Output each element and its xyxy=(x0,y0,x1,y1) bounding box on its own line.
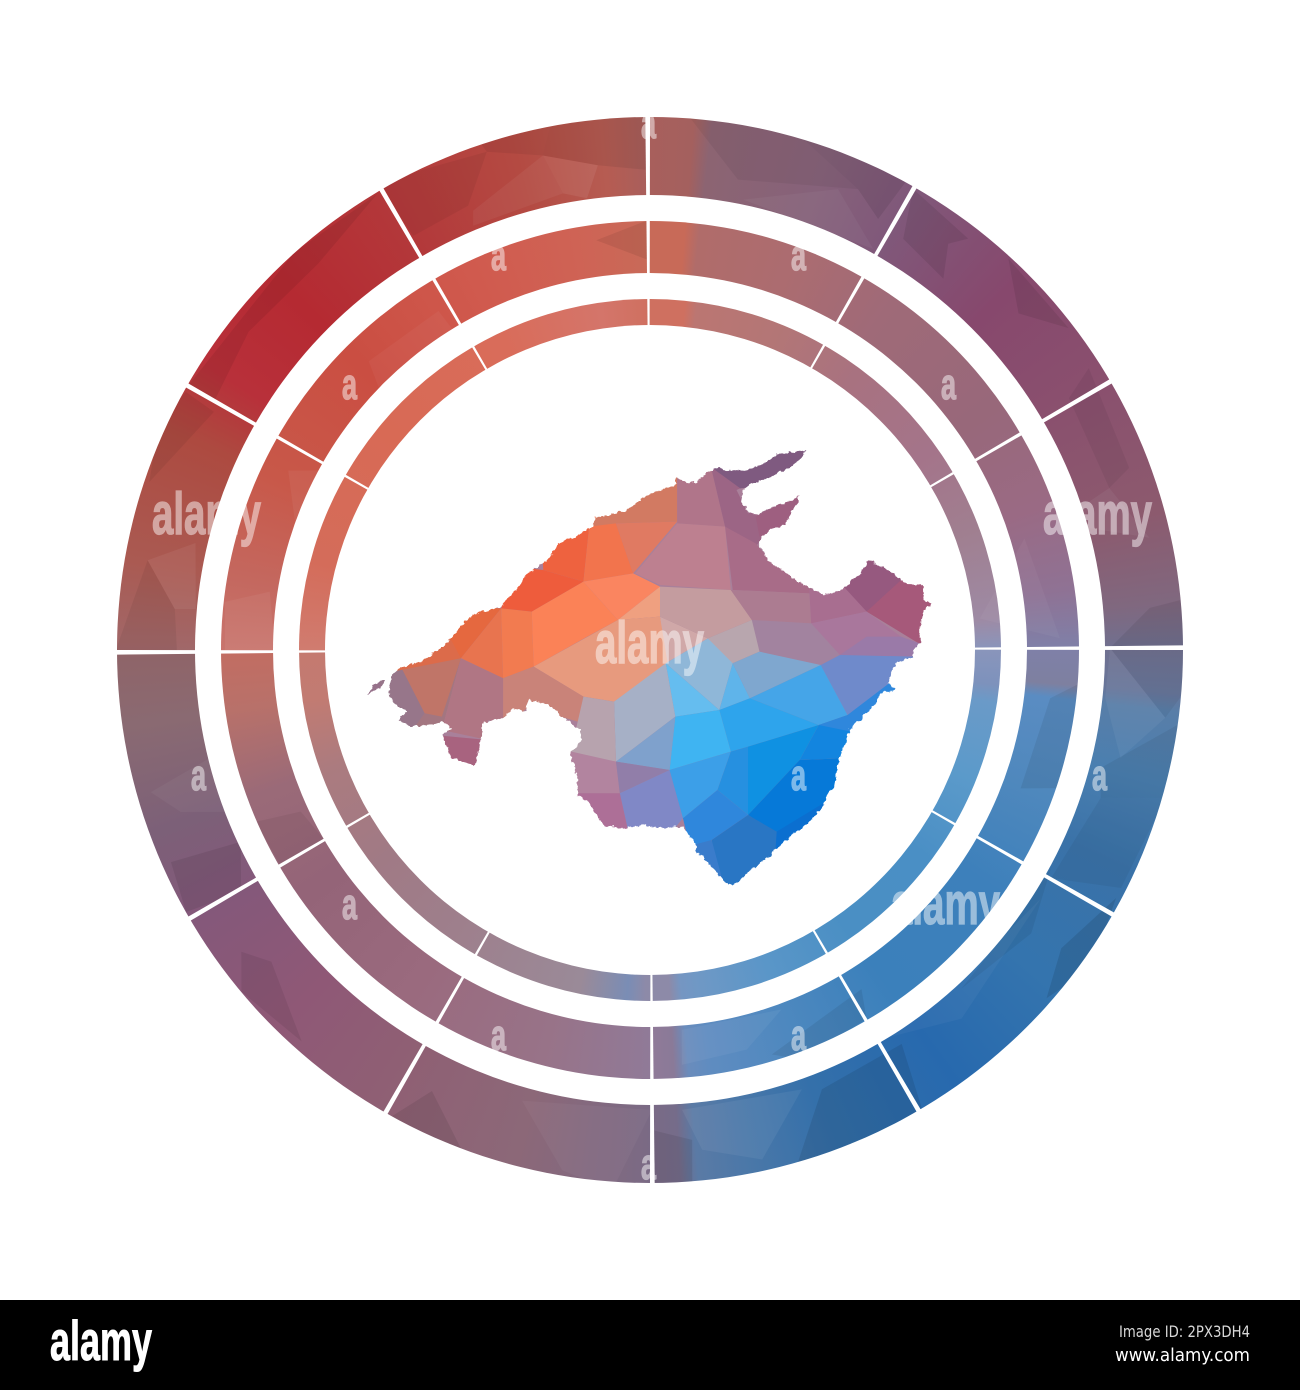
watermarks: a xyxy=(1092,751,1107,800)
watermarks: a xyxy=(941,360,956,409)
badge: outer ring disc xyxy=(117,117,1183,1183)
watermarks: alamy xyxy=(595,610,704,676)
watermarks: a xyxy=(491,231,506,280)
low-poly facets over rings xyxy=(113,113,1192,1192)
inner white centre xyxy=(325,325,975,975)
watermarks: a xyxy=(342,880,357,929)
footer logo: alamy xyxy=(50,1309,152,1372)
watermarks: a xyxy=(191,751,206,800)
watermarks: alamy xyxy=(891,871,1000,937)
watermarks: a xyxy=(491,1011,506,1060)
watermarks: alamy xyxy=(1043,481,1152,547)
segment dividers xyxy=(106,106,1194,1194)
watermarks: a xyxy=(641,1140,656,1189)
badge: middle ring disc xyxy=(221,221,1079,1079)
map: Mallorca low-poly island xyxy=(367,450,932,886)
image id: Image ID: 2PX3DH4 xyxy=(1119,1322,1250,1341)
site url: www.alamy.com xyxy=(1115,1345,1250,1366)
outer gap xyxy=(195,195,1105,1105)
watermarks: a xyxy=(791,231,806,280)
watermarks: a xyxy=(342,360,357,409)
watermarks xyxy=(152,99,1152,1189)
watermarks: a xyxy=(641,99,656,148)
watermarks: a xyxy=(791,1011,806,1060)
badge: inner ring disc xyxy=(299,299,1001,1001)
watermarks: a xyxy=(791,751,806,800)
middle gap xyxy=(273,273,1027,1027)
watermarks: alamy xyxy=(152,481,261,547)
footer bar xyxy=(0,1300,1300,1390)
